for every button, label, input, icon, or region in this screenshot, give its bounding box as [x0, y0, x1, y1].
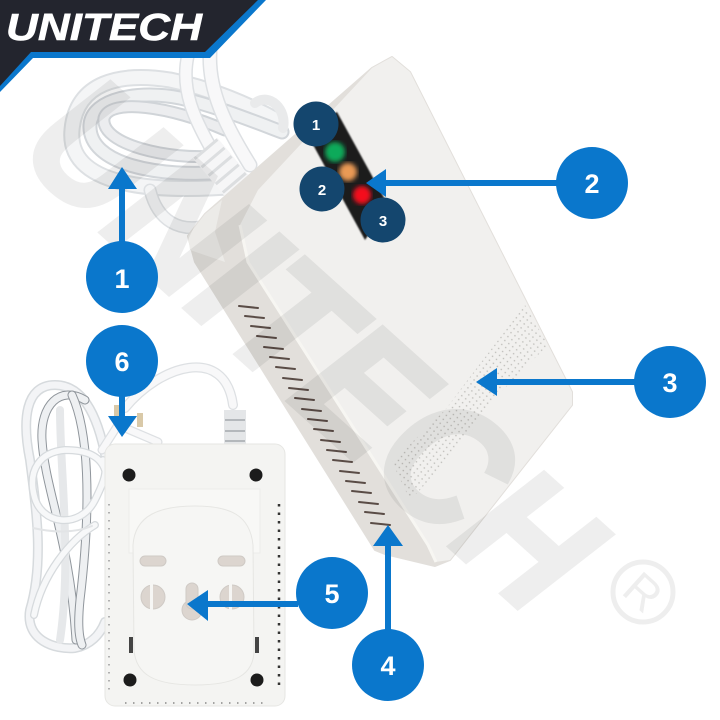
LED badge 3 [360, 198, 406, 242]
plate slots and keyhole [140, 556, 245, 620]
LED panel [305, 112, 388, 240]
screw holes [122, 468, 264, 686]
header banner [0, 0, 266, 92]
device: gas detector body [188, 57, 572, 566]
callout 2: LED indicators [366, 147, 628, 219]
callout 2: LED indicators: 2 [584, 169, 600, 199]
callout 4: vents [352, 525, 424, 701]
logo text: UNITECH [6, 7, 204, 49]
LED badge 2: 2 [318, 182, 326, 199]
callout 1: cable [86, 167, 158, 313]
cable coil: top device [72, 52, 284, 228]
LED badge 1 [294, 102, 338, 146]
callout 3: speaker [476, 346, 706, 418]
LED badge 3: 3 [379, 213, 387, 230]
LED badge 1: 1 [312, 117, 320, 134]
callout 5: mounting keyhole [187, 557, 368, 629]
device: back view [105, 444, 285, 706]
callout 6: plug: 6 [114, 347, 130, 377]
watermark: UNITECH [0, 41, 637, 650]
callout 6: plug [86, 325, 158, 437]
mounting plate [133, 506, 254, 685]
callout 3: speaker: 3 [662, 368, 678, 398]
LED badge 2 [300, 166, 344, 212]
plug pins [114, 405, 143, 427]
callout 1: cable: 1 [114, 264, 130, 294]
registered mark: R [613, 562, 673, 622]
back view cable coil [26, 367, 233, 648]
callout 5: mounting keyhole: 5 [324, 579, 340, 609]
cable connector [224, 410, 246, 446]
callout 4: vents: 4 [380, 651, 396, 681]
side ventilation dots [278, 504, 280, 690]
speaker perforations [392, 305, 548, 500]
vent slots [239, 306, 390, 525]
